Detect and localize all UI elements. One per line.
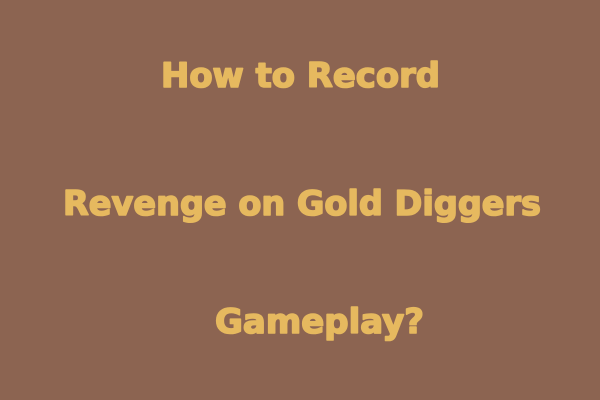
title line 3: Gameplay? (215, 302, 424, 342)
title line 2: Revenge on Gold Diggers (63, 184, 541, 224)
title line 1: How to Record (161, 56, 440, 96)
